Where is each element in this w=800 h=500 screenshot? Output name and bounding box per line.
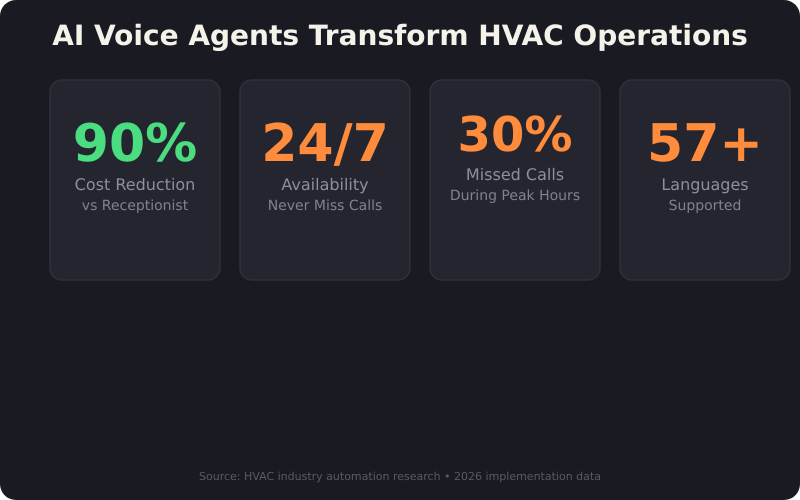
panel: languages: 57+ xyxy=(647,114,763,174)
panel: availability xyxy=(240,80,410,280)
panel: missed calls xyxy=(430,80,600,280)
panel: missed calls: During Peak Hours xyxy=(450,188,580,204)
source footer: Source: HVAC industry automation research • 2026 implementation data xyxy=(199,470,601,483)
panel: availability: Never Miss Calls xyxy=(268,198,382,214)
panel: availability: 24/7 xyxy=(261,114,389,174)
panel: cost reduction: Cost Reduction xyxy=(75,175,195,194)
panel: cost reduction: 90% xyxy=(73,114,197,174)
panel: languages: Supported xyxy=(669,198,741,214)
panel: missed calls: Missed Calls xyxy=(466,165,564,184)
panel: missed calls: 30% xyxy=(458,107,572,163)
panel: cost reduction: vs Receptionist xyxy=(82,198,189,214)
panel: availability: Availability xyxy=(281,175,369,194)
panel: cost reduction xyxy=(50,80,220,280)
panel: languages xyxy=(620,80,790,280)
title: AI Voice Agents Transform HVAC Operations xyxy=(52,19,748,52)
panel: languages: Languages xyxy=(661,175,749,194)
